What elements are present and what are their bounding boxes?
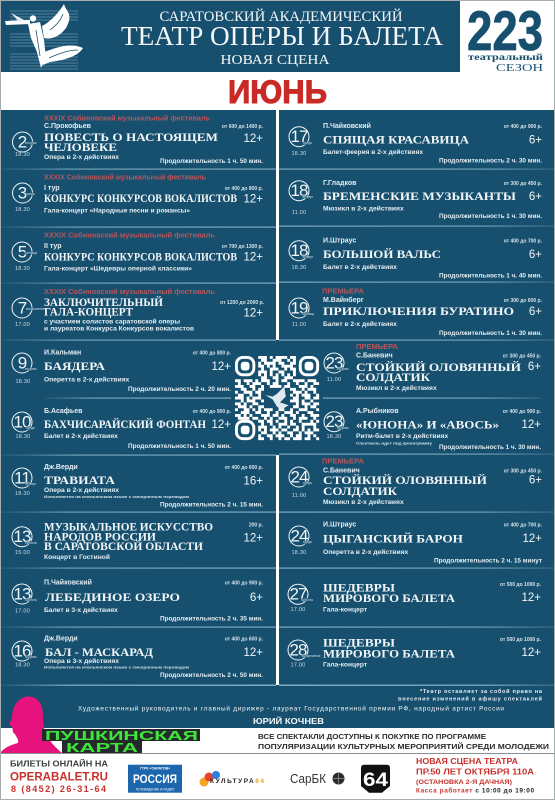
event: 18 June, Большой вальс: БОЛЬШОЙ ВАЛЬС — [323, 247, 441, 261]
event: 23 June, Юнона и Авось: вторник — [337, 426, 349, 430]
event: 5 June, Конкурс конкурсов вокалистов II тур: Гала-концерт «Шедевры оперной классики» — [44, 264, 192, 272]
event: 9 June, Баядера: вторник — [25, 367, 37, 371]
event: 11 June, Травиата: от 400 до 600 р. — [225, 465, 264, 471]
theatre name — [121, 8, 443, 68]
event: 19 June, Приключения Буратино: ПРИКЛЮЧЕНИЯ БУРАТИНО — [323, 306, 514, 318]
event: 23 June, Юнона и Авось: Продолжительность 1 ч. 30 мин. — [439, 444, 541, 451]
theatre address and box office — [416, 757, 534, 794]
event: 13 June, Лебединое озеро — [12, 579, 264, 623]
event: 19 June, Приключения Буратино — [289, 286, 543, 337]
event: 5 June, Конкурс конкурсов вокалистов II тур: 12+ — [243, 252, 263, 264]
logo: Kultura 64 — [200, 771, 264, 786]
event: 3 June, Конкурс конкурсов вокалистов I тур: XXXIX Собиновский музыкальный фестиваль — [44, 172, 207, 182]
event: 11 June, Травиата: ТРАВИАТА — [44, 475, 116, 487]
event: 13 June, Музыкальное искусство народов России — [12, 522, 264, 561]
event: 27 June, Шедевры мирового балета: от 500 до 1000 р. — [500, 582, 542, 588]
event: 23 June, Стойкий оловянный солдатик: ПРЕМЬЕРА — [356, 342, 398, 351]
event: 19 June, Приключения Буратино: от 300 до 600 р. — [504, 298, 543, 304]
theatre name: ТЕАТР ОПЕРЫ И БАЛЕТА — [121, 21, 443, 51]
event: 16 June, Бал-маскарад: 18.30 — [15, 663, 30, 669]
event: 11 June, Травиата: 16+ — [243, 476, 263, 488]
event: 23 June, Юнона и Авось: А.Рыбников — [356, 407, 399, 415]
event: 7 June, Заключительный гала-концерт: с участием солистов саратовской оперы — [44, 318, 180, 326]
event: 28 June, Шедевры мирового балета: ШЕДЕВРЫ — [323, 638, 396, 650]
theatre disclaimer note: внесение изменений в афишу спектаклей — [398, 696, 543, 703]
event: 13 June, Лебединое озеро: Балет в 3-х действиях — [44, 606, 118, 614]
event: 16 June, Бал-маскарад: Продолжительность 2 ч. 50 мин. — [160, 672, 263, 679]
event: 27 June, Шедевры мирового балета: Гала-концерт — [323, 607, 368, 614]
event: 10 June, Бахчисарайский фонтан: 10 — [14, 412, 31, 432]
event: 13 June, Лебединое озеро: П.Чайковский — [44, 579, 92, 587]
logo: GTRK Saratov Rossiya: ТЕЛЕВИДЕНИЕ И РАДИО — [136, 788, 175, 792]
event: 11 June, Травиата: четверг — [25, 482, 37, 486]
event: 18 June, Бременские музыканты: Мюзикл в 2-х действиях — [323, 205, 404, 213]
event: 18 June, Большой вальс: 18.30 — [292, 265, 306, 271]
event: 27 June, Шедевры мирового балета: МИРОВОГО БАЛЕТА — [323, 593, 456, 605]
event: 27 June, Шедевры мирового балета: 17.00 — [290, 607, 306, 613]
event: 23 June, Юнона и Авось: 12+ — [521, 419, 541, 431]
event: 18 June, Большой вальс: И.Штраус — [323, 238, 356, 245]
Pushkin card promo — [0, 696, 549, 755]
event: 2 June, Повесть о настоящем человеке: Опера в 2-х действиях — [44, 153, 119, 161]
event: 18 June, Бременские музыканты: от 300 до 450 р. — [504, 181, 543, 187]
event: 13 June, Музыкальное искусство народов России: В САРАТОВСКОЙ ОБЛАСТИ — [44, 539, 203, 553]
event: 23 June, Юнона и Авось — [324, 407, 542, 451]
event: 10 June, Бахчисарайский фонтан: от 400 до 900 р. — [193, 409, 232, 415]
event: 23 June, Юнона и Авось: от 400 до 900 р. — [503, 409, 542, 415]
event: 13 June, Лебединое озеро: 6+ — [250, 592, 263, 604]
season badge: театральный — [468, 52, 544, 63]
event: 24 June, Цыганский барон — [289, 522, 543, 565]
event: 7 June, Заключительный гала-концерт: ЗАКЛЮЧИТЕЛЬНЫЙ — [44, 295, 163, 309]
logo: SarBK: СарБК — [290, 771, 326, 786]
event: 23 June, Юнона и Авось: 23 — [326, 412, 343, 431]
event: 11 June, Травиата: Исполняется на итальянском языке с синхронным переводом — [44, 495, 189, 499]
event: 5 June, Конкурс конкурсов вокалистов II тур: II тур — [44, 243, 62, 250]
event: 19 June, Приключения Буратино: М.Вайнберг — [323, 296, 364, 304]
event: 16 June, Бал-маскарад: БАЛ - МАСКАРАД — [45, 647, 153, 659]
artistic director credit: ЮРИЙ КОЧНЕВ — [253, 715, 324, 726]
event: 9 June, Баядера — [12, 350, 232, 393]
event: 9 June, Баядера: Оперетта в 2-х действиях — [44, 376, 129, 384]
event: 24 June, Стойкий оловянный солдатик: от 300 до 450 р. — [504, 469, 543, 475]
event: 24 June, Стойкий оловянный солдатик: СТОЙКИЙ ОЛОВЯННЫЙ — [323, 473, 487, 487]
event: 18 June, Большой вальс: от 400 до 700 р. — [504, 239, 543, 245]
theatre address and box office: НОВАЯ СЦЕНА ТЕАТРА — [416, 757, 518, 766]
event: 13 June, Лебединое озеро: Продолжительность 2 ч. 35 мин. — [160, 616, 263, 623]
theatre disclaimer note: *Театр оставляет за собой право на — [420, 688, 543, 695]
logo: Kultura 64: КУЛЬТУРА64 — [210, 778, 264, 785]
logo: channel 64 — [361, 765, 390, 793]
logo: angel with trumpet on music staves — [5, 4, 83, 69]
ticket info — [10, 760, 108, 794]
event: 17 June, Спящая красавица — [289, 122, 543, 165]
event: 18 June, Бременские музыканты: Г.Гладков — [323, 180, 357, 187]
Pushkin card label: ПУШКИНСКАЯ — [45, 728, 198, 743]
event: 18 June, Бременские музыканты — [289, 180, 543, 220]
event: 7 June, Заключительный гала-концерт: от 1200 до 2000 р. — [220, 300, 265, 306]
event: 3 June, Конкурс конкурсов вокалистов I тур: Гала-концерт «Народные песни и романсы» — [44, 208, 190, 214]
event: 19 June, Приключения Буратино: Балет в 2-х действиях — [323, 320, 397, 328]
event: 5 June, Конкурс конкурсов вокалистов II тур: 18.30 — [15, 266, 30, 272]
event: 23 June, Стойкий оловянный солдатик: 11.00 — [327, 377, 341, 383]
event: 24 June, Стойкий оловянный солдатик — [289, 456, 543, 506]
event: 28 June, Шедевры мирового балета — [288, 637, 542, 669]
event: 13 June, Музыкальное искусство народов России: 13 — [14, 527, 31, 546]
event: 28 June, Шедевры мирового балета: МИРОВОГО БАЛЕТА — [323, 648, 456, 660]
event: 13 June, Музыкальное искусство народов России: суббота — [25, 541, 37, 545]
event: 28 June, Шедевры мирового балета: 28 — [290, 640, 307, 660]
event: 18 June, Большой вальс: 6+ — [529, 249, 542, 261]
event: 3 June, Конкурс конкурсов вокалистов I тур: от 400 до 800 р. — [225, 186, 264, 192]
event: 2 June, Повесть о настоящем человеке — [12, 114, 264, 165]
event: 16 June, Бал-маскарад: 16 — [14, 642, 31, 660]
event: 28 June, Шедевры мирового балета: от 500 до 1000 р. — [500, 637, 542, 643]
QR code — [235, 357, 319, 439]
event: 13 June, Музыкальное искусство народов России: 200 р. — [249, 522, 264, 528]
event: 2 June, Повесть о настоящем человеке: Продолжительность 1 ч. 50 мин. — [160, 158, 263, 165]
schedule background — [0, 110, 555, 728]
event: 18 June, Большой вальс: четверг — [302, 255, 314, 259]
event: 10 June, Бахчисарайский фонтан: Балет в 2-х действиях — [44, 432, 118, 440]
event: 18 June, Бременские музыканты: четверг — [302, 195, 314, 199]
event: 18 June, Большой вальс: Балет в 2-х действиях — [323, 263, 397, 271]
theatre address and box office: (ОСТАНОВКА 2-Я ДАЧНАЯ) — [416, 779, 512, 786]
event: 10 June, Бахчисарайский фонтан: среда — [26, 426, 35, 430]
event: 7 June, Заключительный гала-концерт: ГАЛА-КОНЦЕРТ — [44, 306, 133, 318]
event: 16 June, Бал-маскарад: вторник — [25, 655, 37, 659]
theatre name: НОВАЯ СЦЕНА — [220, 53, 330, 68]
event: 17 June, Спящая красавица: среда — [303, 141, 312, 145]
event: 24 June, Стойкий оловянный солдатик: среда — [303, 481, 312, 485]
event: 23 June, Юнона и Авось: 18.30 — [326, 434, 342, 440]
event: 9 June, Баядера: И.Кальман — [44, 350, 81, 356]
event: 24 June, Стойкий оловянный солдатик: 24 — [291, 468, 308, 486]
event: 18 June, Бременские музыканты: БРЕМЕНСКИЕ МУЗЫКАНТЫ — [323, 191, 517, 203]
event: 16 June, Бал-маскарад: от 400 до 600 р. — [225, 637, 264, 643]
event: 23 June, Стойкий оловянный солдатик: Мюзикл в 2-х действиях — [356, 384, 437, 392]
event: 3 June, Конкурс конкурсов вокалистов I тур: 18.30 — [15, 207, 30, 213]
artistic director credit: Художественный руководитель и главный дирижер - лауреат Государственной премии РФ, народный артист России — [78, 705, 504, 713]
event: 28 June, Шедевры мирового балета: 17.00 — [290, 663, 306, 669]
Pushkin card text — [258, 734, 549, 751]
event: 5 June, Конкурс конкурсов вокалистов II тур: 5 — [18, 242, 27, 262]
event: 17 June, Спящая красавица: 17 — [291, 127, 308, 146]
event: 18 June, Большой вальс: 18 — [291, 241, 308, 260]
event: 27 June, Шедевры мирового балета — [288, 582, 542, 614]
event: 28 June, Шедевры мирового балета: Гала-концерт — [323, 662, 368, 669]
event: 13 June, Лебединое озеро: 13 — [14, 584, 31, 604]
logo: GTRK Saratov Rossiya: РОССИЯ — [133, 774, 177, 786]
event: 13 June, Лебединое озеро: от 400 до 900 р. — [225, 581, 264, 587]
event: 18 June, Большой вальс — [289, 238, 543, 280]
event: 9 June, Баядера: 18.30 — [16, 379, 30, 385]
event: 7 June, Заключительный гала-концерт: XXXIX Собиновский музыкальный фестиваль — [44, 287, 216, 296]
event: 17 June, Спящая красавица: Продолжительность 2 ч. 30 мин. — [439, 158, 542, 165]
event: 10 June, Бахчисарайский фонтан: БАХЧИСАРАЙСКИЙ ФОНТАН — [44, 417, 206, 431]
event: 2 June, Повесть о настоящем человеке: XXXIX Собиновский музыкальный фестиваль — [44, 114, 211, 122]
event: 24 June, Цыганский барон: Продолжительность 2 ч. 15 минут — [434, 558, 542, 565]
event: 23 June, Стойкий оловянный солдатик — [324, 342, 542, 392]
event: 5 June, Конкурс конкурсов вокалистов II тур: пятница — [25, 251, 37, 255]
event: 24 June, Цыганский барон: от 400 до 700 р. — [504, 523, 543, 529]
event: 2 June, Повесть о настоящем человеке: 12+ — [243, 133, 263, 145]
Pushkin card label: КАРТА — [66, 740, 139, 755]
event: 9 June, Баядера: Продолжительность 2 ч. 20 мин. — [128, 386, 231, 393]
event: 19 June, Приключения Буратино: 6+ — [529, 306, 542, 318]
event: 10 June, Бахчисарайский фонтан: 18.30 — [16, 434, 30, 440]
event: 23 June, Стойкий оловянный солдатик: 23 — [326, 354, 343, 372]
event: 28 June, Шедевры мирового балета: воскресенье — [302, 654, 321, 658]
event: 19 June, Приключения Буратино: ПРЕМЬЕРА — [322, 286, 364, 295]
Pushkin card label — [42, 728, 200, 755]
event: 24 June, Стойкий оловянный солдатик: 11.00 — [292, 493, 306, 499]
event: 19 June, Приключения Буратино: Продолжительность 1 ч. 30 мин. — [439, 330, 542, 337]
event: 2 June, Повесть о настоящем человеке: ЧЕЛОВЕКЕ — [44, 142, 117, 154]
event: 27 June, Шедевры мирового балета: суббота — [301, 598, 313, 602]
month heading: ИЮНЬ — [228, 74, 327, 110]
event: 19 June, Приключения Буратино: 19 — [291, 298, 308, 318]
event: 5 June, Конкурс конкурсов вокалистов II тур: XXXIX Собиновский музыкальный фестиваль — [44, 230, 216, 240]
Pushkin card text: ВСЕ СПЕКТАКЛИ ДОСТУПНЫ К ПОКУПКЕ ПО ПРОГРАММЕ — [258, 734, 486, 741]
event: 13 June, Лебединое озеро: суббота — [25, 598, 37, 602]
event: 23 June, Стойкий оловянный солдатик: СТОЙКИЙ ОЛОВЯННЫЙ — [356, 360, 521, 374]
event: 24 June, Цыганский барон: И.Штраус — [323, 522, 356, 529]
event: 16 June, Бал-маскарад: Исполняется на итальянском языке с синхронным переводом — [44, 666, 189, 670]
event: 13 June, Лебединое озеро: ЛЕБЕДИНОЕ ОЗЕРО — [45, 592, 180, 604]
theatre disclaimer note — [398, 688, 543, 703]
event: 16 June, Бал-маскарад: Дж.Верди — [44, 636, 78, 643]
event: 18 June, Бременские музыканты: 6+ — [529, 191, 542, 203]
event: 27 June, Шедевры мирового балета: ШЕДЕВРЫ — [323, 583, 396, 595]
artistic director credit — [78, 705, 504, 726]
event: 7 June, Заключительный гала-концерт: воскресенье — [26, 307, 45, 311]
event: 5 June, Конкурс конкурсов вокалистов II тур — [12, 230, 264, 272]
event: 23 June, Юнона и Авось: Спектакль идет под фонограмму — [356, 441, 433, 445]
event: 23 June, Юнона и Авось: Ритм-балет в 2-х действиях — [356, 432, 448, 440]
event: 10 June, Бахчисарайский фонтан: 12+ — [211, 419, 231, 431]
event: 3 June, Конкурс конкурсов вокалистов I тур: среда — [26, 192, 35, 196]
event: 16 June, Бал-маскарад — [12, 636, 264, 679]
event: 2 June, Повесть о настоящем человеке: вторник — [25, 141, 37, 145]
event: 17 June, Спящая красавица: Балет-феерия в 2-х действиях — [323, 148, 423, 156]
event: 16 June, Бал-маскарад: 12+ — [243, 647, 263, 659]
event: 9 June, Баядера: 9 — [18, 354, 27, 372]
event: 13 June, Музыкальное искусство народов России: Концерт в Гостиной — [44, 553, 110, 561]
event: 7 June, Заключительный гала-концерт: 12+ — [243, 308, 263, 320]
event: 2 June, Повесть о настоящем человеке: ПОВЕСТЬ О НАСТОЯЩЕМ — [44, 132, 218, 144]
event: 19 June, Приключения Буратино: 11.00 — [292, 322, 306, 328]
event: 3 June, Конкурс конкурсов вокалистов I тур — [12, 172, 264, 214]
event: 5 June, Конкурс конкурсов вокалистов II тур: КОНКУРС КОНКУРСОВ ВОКАЛИСТОВ — [44, 252, 237, 264]
event: 2 June, Повесть о настоящем человеке: от 600 до 1400 р. — [222, 124, 264, 130]
event: 24 June, Цыганский барон: Оперетта в 2-х действиях — [323, 548, 408, 556]
event: 24 June, Цыганский барон: ЦЫГАНСКИЙ БАРОН — [323, 532, 463, 546]
event: 24 June, Стойкий оловянный солдатик: С.Баневич — [323, 468, 360, 475]
event: 17 June, Спящая красавица: от 400 до 900 р. — [504, 124, 543, 130]
event: 24 June, Стойкий оловянный солдатик: ПРЕМЬЕРА — [322, 456, 364, 465]
event: 23 June, Стойкий оловянный солдатик: 6+ — [528, 361, 541, 373]
event: 23 June, Юнона и Авось: «ЮНОНА» И «АВОСЬ» — [356, 419, 499, 431]
event: 23 June, Стойкий оловянный солдатик: от 300 до 450 р. — [503, 354, 542, 360]
event: 18 June, Большой вальс: Продолжительность 1 ч. 40 мин. — [439, 273, 542, 280]
header band — [0, 1, 460, 72]
event: 18 June, Бременские музыканты: 18 — [291, 181, 308, 200]
event: 10 June, Бахчисарайский фонтан: Продолжительность 1 ч. 50 мин. — [128, 443, 231, 450]
event: 23 June, Стойкий оловянный солдатик: вторник — [337, 367, 349, 371]
event: 24 June, Цыганский барон: 18.30 — [292, 550, 306, 556]
event: 11 June, Травиата: 11 — [14, 468, 30, 488]
event: 18 June, Бременские музыканты: 11.00 — [292, 210, 306, 216]
event: 11 June, Травиата: Опера в 2-х действиях — [44, 486, 119, 494]
event: 19 June, Приключения Буратино: пятница — [302, 312, 314, 316]
event: 28 June, Шедевры мирового балета: 12+ — [521, 647, 541, 659]
event: 27 June, Шедевры мирового балета: 12+ — [521, 592, 541, 604]
event: 11 June, Травиата: Дж.Верди — [44, 464, 78, 471]
event: 10 June, Бахчисарайский фонтан: Б.Асафьев — [44, 408, 83, 415]
logo: channel 64: 64 — [363, 770, 389, 791]
icon: Pushkin bust — [0, 696, 62, 753]
event: 16 June, Бал-маскарад: Опера в 3-х действиях — [44, 657, 119, 665]
event: 10 June, Бахчисарайский фонтан — [12, 408, 232, 450]
event: 27 June, Шедевры мирового балета: 27 — [290, 584, 307, 604]
event: 2 June, Повесть о настоящем человеке: С.Прокофьев — [44, 123, 92, 130]
season badge: СЕЗОН — [496, 62, 543, 74]
theatre address and box office: Касса работает с 10:00 до 19:00 — [416, 786, 534, 794]
event: 23 June, Стойкий оловянный солдатик: С.Баневич — [356, 353, 393, 360]
event: 24 June, Цыганский барон: 24 — [291, 526, 308, 546]
event: 24 June, Цыганский барон: 12+ — [522, 533, 542, 545]
event: 7 June, Заключительный гала-концерт — [12, 287, 265, 332]
ticket info: 8 (8452) 26-31-64 — [11, 784, 106, 794]
event: 7 June, Заключительный гала-концерт: и лауреатов Конкурса Конкурсов вокалистов — [44, 326, 194, 332]
event: 7 June, Заключительный гала-концерт: 17.00 — [15, 322, 30, 328]
event: 17 June, Спящая красавица: СПЯЩАЯ КРАСАВИЦА — [323, 134, 470, 146]
event: 3 June, Конкурс конкурсов вокалистов I тур: 12+ — [243, 194, 263, 206]
event: 17 June, Спящая красавица: П.Чайковский — [323, 122, 371, 130]
event: 2 June, Повесть о настоящем человеке: 18.30 — [15, 152, 30, 158]
event: 3 June, Конкурс конкурсов вокалистов I тур: I тур — [44, 185, 60, 192]
event: 9 June, Баядера: от 400 до 800 р. — [193, 350, 232, 356]
Pushkin card text: ПОПУЛЯРИЗАЦИИ КУЛЬТУРНЫХ МЕРОПРИЯТИЙ СРЕДИ МОЛОДЕЖИ — [258, 742, 549, 751]
event: 9 June, Баядера: БАЯДЕРА — [44, 361, 106, 373]
event: 3 June, Конкурс конкурсов вокалистов I тур: 3 — [18, 184, 27, 202]
event: 11 June, Травиата: Продолжительность 2 ч. 15 мин. — [160, 502, 263, 508]
event: 17 June, Спящая красавица: 18.30 — [292, 151, 306, 157]
event: 3 June, Конкурс конкурсов вокалистов I тур: КОНКУРС КОНКУРСОВ ВОКАЛИСТОВ — [44, 193, 237, 205]
event: 2 June, Повесть о настоящем человеке: 2 — [18, 132, 27, 152]
theatre address and box office: ПР.50 ЛЕТ ОКТЯБРЯ 110А — [416, 768, 534, 777]
event: 13 June, Музыкальное искусство народов России: 12+ — [243, 533, 263, 545]
divider: footer rule — [0, 753, 555, 754]
event: 18 June, Бременские музыканты: Продолжительность 1 ч. 30 мин. — [439, 213, 542, 220]
ticket info: БИЛЕТЫ ОНЛАЙН НА — [10, 760, 108, 769]
event: 13 June, Лебединое озеро: 17.00 — [15, 609, 30, 615]
event: 24 June, Стойкий оловянный солдатик: СОЛДАТИК — [323, 486, 398, 498]
event: 17 June, Спящая красавица: 6+ — [529, 134, 542, 146]
event: 11 June, Травиата — [12, 464, 264, 508]
event: 24 June, Стойкий оловянный солдатик: Мюзикл в 2-х действиях — [323, 498, 404, 506]
event: 24 June, Цыганский барон: среда — [303, 540, 312, 544]
logo: GTRK Saratov Rossiya: ГТРК «САРАТОВ» — [140, 766, 170, 770]
event: 24 June, Стойкий оловянный солдатик: 6+ — [529, 474, 542, 486]
event: 9 June, Баядера: 12+ — [211, 361, 231, 373]
event: 13 June, Музыкальное искусство народов России: НАРОДОВ РОССИИ — [44, 532, 156, 544]
logo: GTRK Saratov Rossiya — [128, 765, 182, 793]
theatre name: САРАТОВСКИЙ АКАДЕМИЧЕСКИЙ — [160, 8, 403, 25]
event: 23 June, Стойкий оловянный солдатик: СОЛДАТИК — [356, 372, 431, 384]
event: 13 June, Музыкальное искусство народов России: МУЗЫКАЛЬНОЕ ИСКУССТВО — [44, 522, 213, 534]
event: 13 June, Музыкальное искусство народов России: 15.00 — [15, 550, 30, 556]
event: 5 June, Конкурс конкурсов вокалистов II тур: от 700 до 1300 р. — [222, 244, 264, 250]
ticket info: OPERABALET.RU — [10, 770, 108, 784]
event: 11 June, Травиата: 18.30 — [15, 491, 30, 497]
event: 7 June, Заключительный гала-концерт: 7 — [18, 298, 27, 318]
